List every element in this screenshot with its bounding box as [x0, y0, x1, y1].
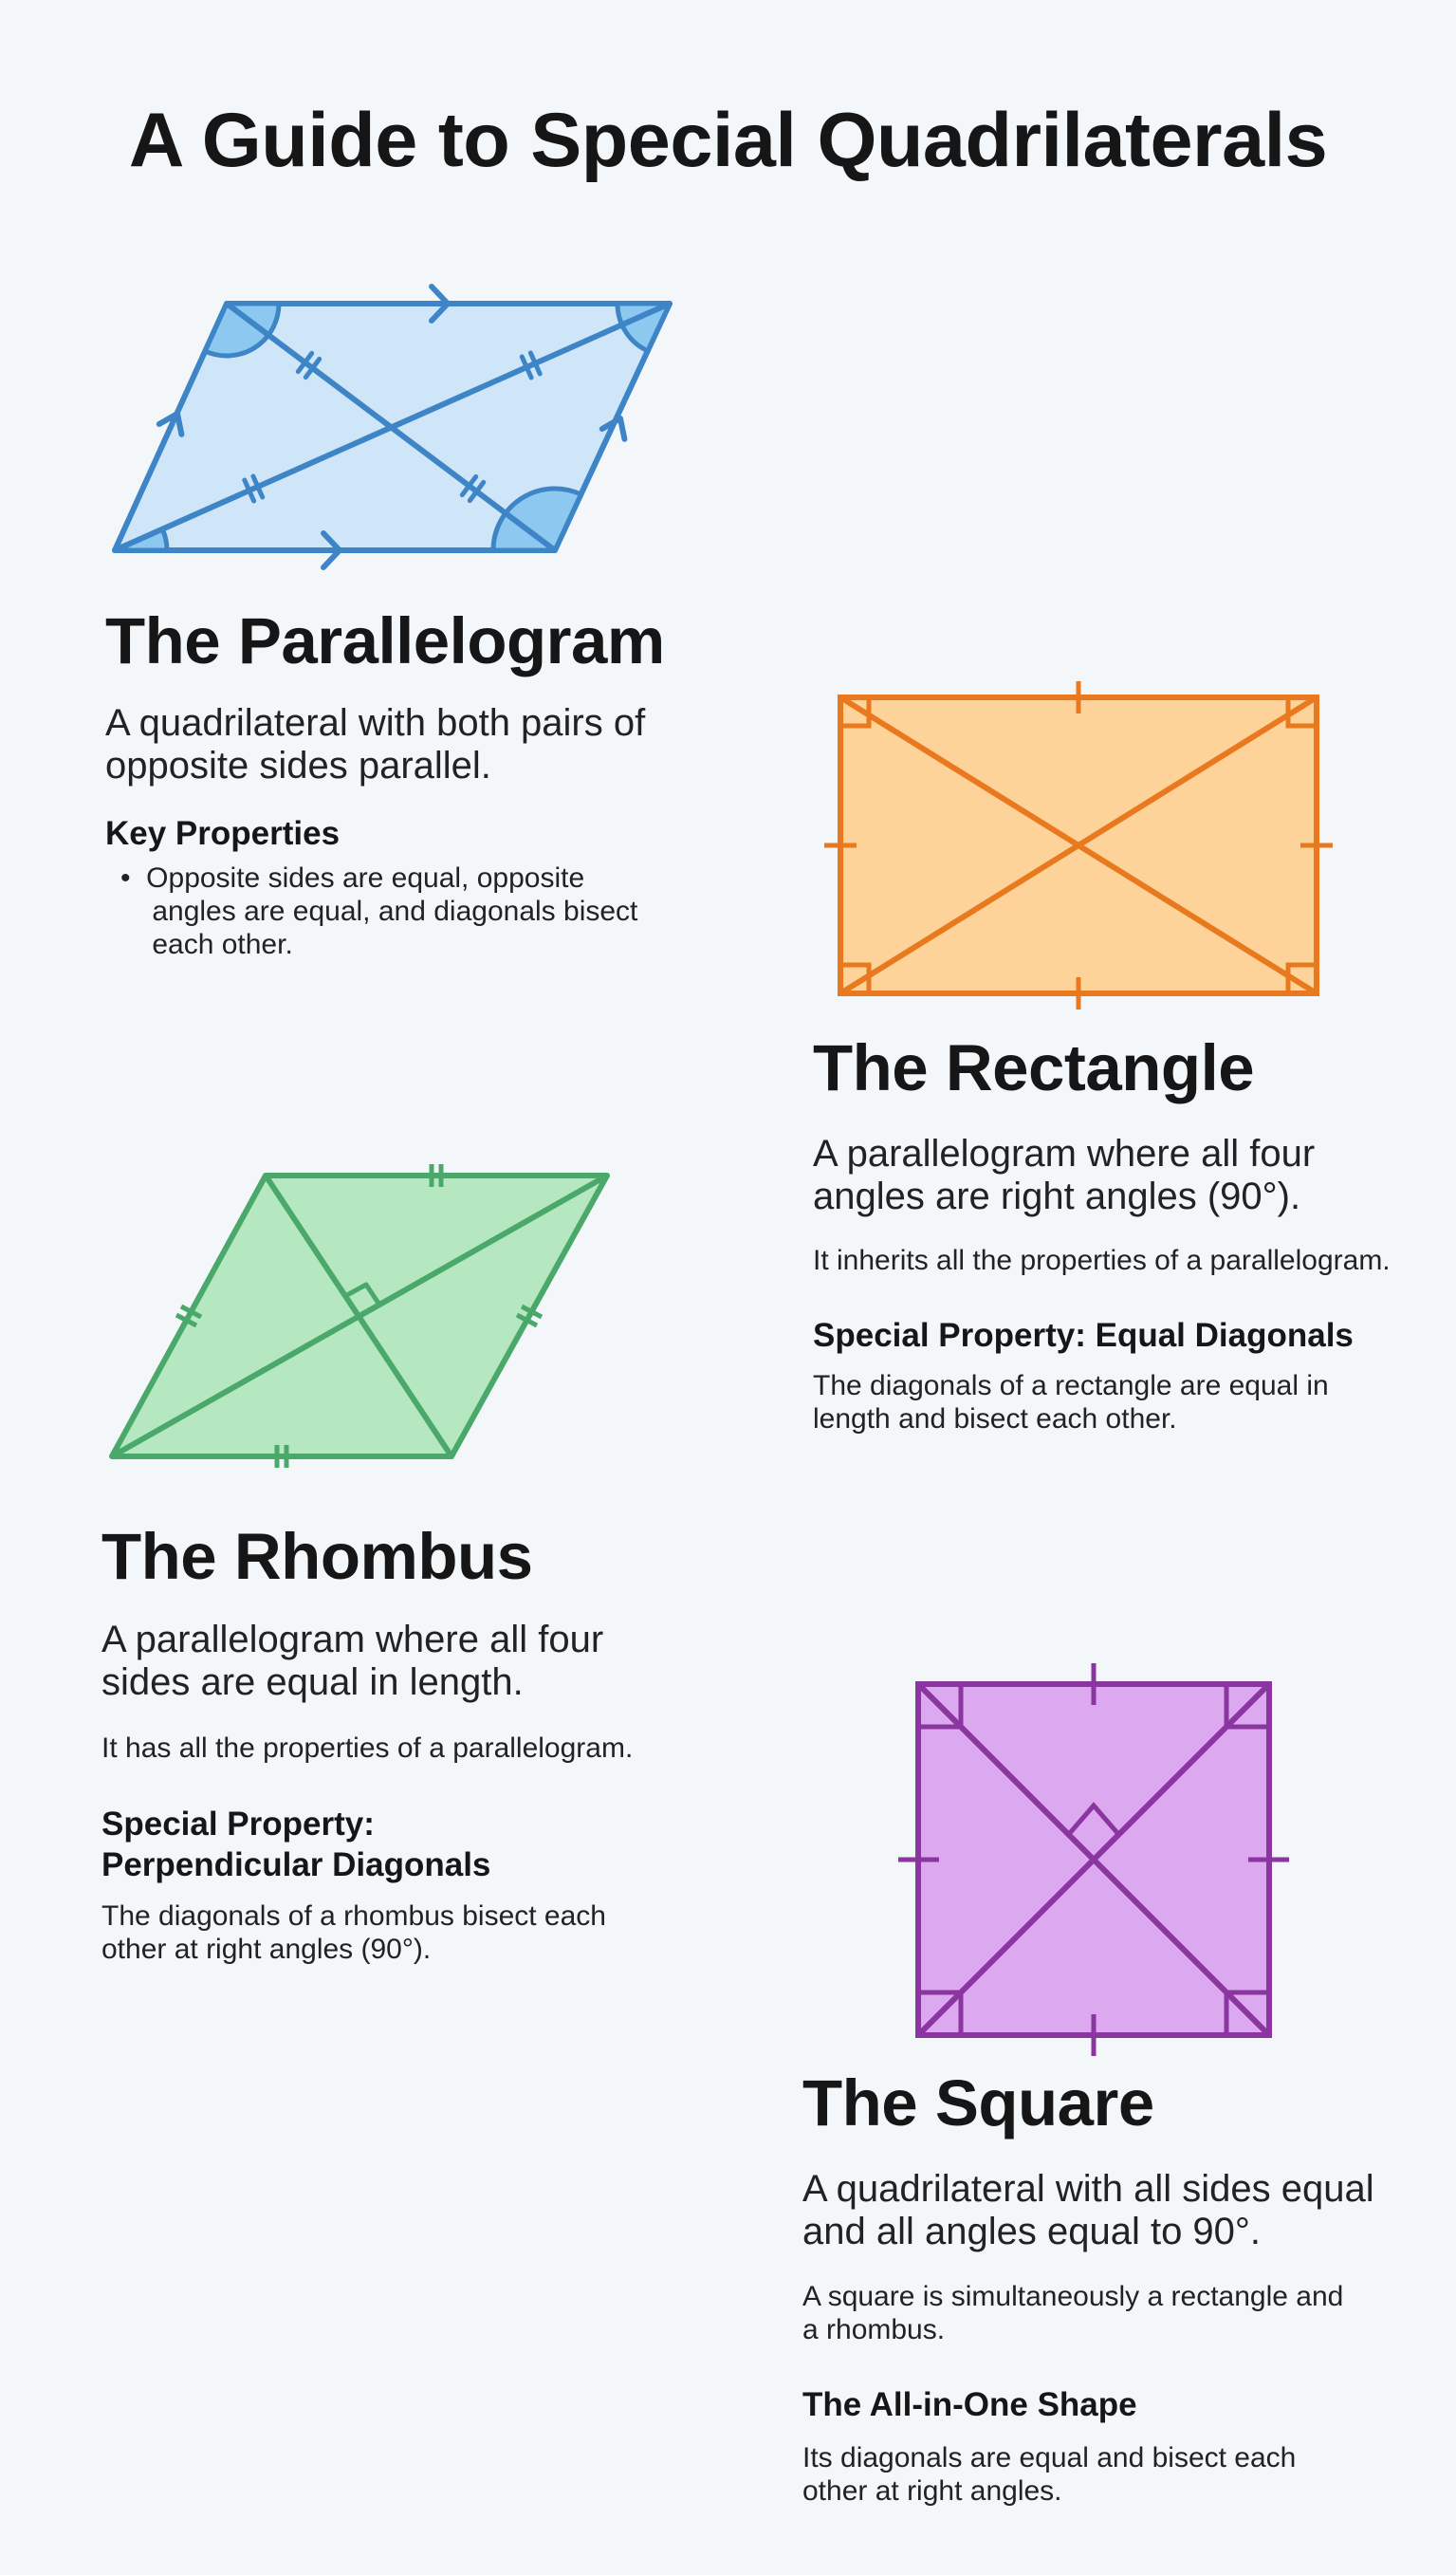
bullet: properties: • Opposite sides are equal, opposite	[120, 862, 584, 894]
subheading: perpendicular diagonals	[101, 1806, 490, 1883]
panel: rhombus text	[101, 1520, 633, 1965]
subheading: all-in-one: The All-in-One Shape	[802, 2386, 1137, 2423]
description: rhombus: A parallelogram where all four	[101, 1619, 603, 1660]
shape: parallelogram	[115, 287, 670, 567]
text: has all properties: It has all the properties of a parallelogram.	[101, 1732, 633, 1764]
text: simultaneously: A square is simultaneously a rectangle and	[802, 2281, 1343, 2312]
panel: rectangle text	[813, 1031, 1391, 1435]
bullet: properties	[120, 862, 637, 960]
description: rhombus: sides are equal in length.	[101, 1661, 524, 1703]
text: perpendicular diagonals: other at right angles (90°).	[101, 1934, 431, 1965]
shape: square	[898, 1663, 1289, 2056]
text: equal diagonals: The diagonals of a rectangle are equal in	[813, 1370, 1329, 1401]
panel: parallelogram text	[105, 604, 665, 960]
title: A Guide to Special Quadrilaterals	[129, 98, 1327, 183]
text: perpendicular diagonals	[101, 1900, 606, 1965]
heading: rhombus: The Rhombus	[101, 1520, 533, 1593]
panel: square text	[802, 2066, 1374, 2507]
description: square: and all angles equal to 90°.	[802, 2211, 1261, 2252]
subheading: perpendicular diagonals: Perpendicular Diagonals	[101, 1846, 490, 1883]
description: rectangle: A parallelogram where all four	[813, 1133, 1315, 1175]
text: equal diagonals	[813, 1370, 1329, 1435]
description: square: A quadrilateral with all sides equal	[802, 2168, 1374, 2210]
subheading: perpendicular diagonals: Special Property:	[101, 1806, 375, 1843]
text: perpendicular diagonals: The diagonals of a rhombus bisect each	[101, 1900, 606, 1932]
text: equal diagonals: length and bisect each other.	[813, 1403, 1177, 1435]
shape: rectangle	[824, 681, 1333, 1010]
text: simultaneously: a rhombus.	[802, 2314, 945, 2345]
bullet: properties: each other.	[152, 929, 293, 960]
description: rectangle	[813, 1133, 1315, 1217]
subheading: key properties: Key Properties	[105, 815, 340, 852]
subheading: equal diagonals: Special Property: Equal Diagonals	[813, 1317, 1354, 1354]
description: parallelogram: opposite sides parallel.	[105, 745, 491, 787]
heading: parallelogram: The Parallelogram	[105, 604, 665, 677]
description: square	[802, 2168, 1374, 2252]
heading: rectangle: The Rectangle	[813, 1031, 1254, 1104]
description: rhombus	[101, 1619, 603, 1703]
heading: square: The Square	[802, 2066, 1154, 2140]
text: inherits: It inherits all the properties of a parallelogram.	[813, 1245, 1391, 1276]
text: simultaneously	[802, 2281, 1343, 2345]
description: parallelogram	[105, 702, 645, 787]
text: all-in-one: Its diagonals are equal and bisect each	[802, 2442, 1296, 2473]
description: rectangle: angles are right angles (90°).	[813, 1176, 1300, 1217]
description: parallelogram: A quadrilateral with both pairs of	[105, 702, 645, 744]
bullet: properties: angles are equal, and diagonals bisect	[152, 896, 637, 927]
text: all-in-one	[802, 2442, 1296, 2507]
text: all-in-one: other at right angles.	[802, 2475, 1062, 2507]
shape: rhombus	[112, 1164, 607, 1468]
